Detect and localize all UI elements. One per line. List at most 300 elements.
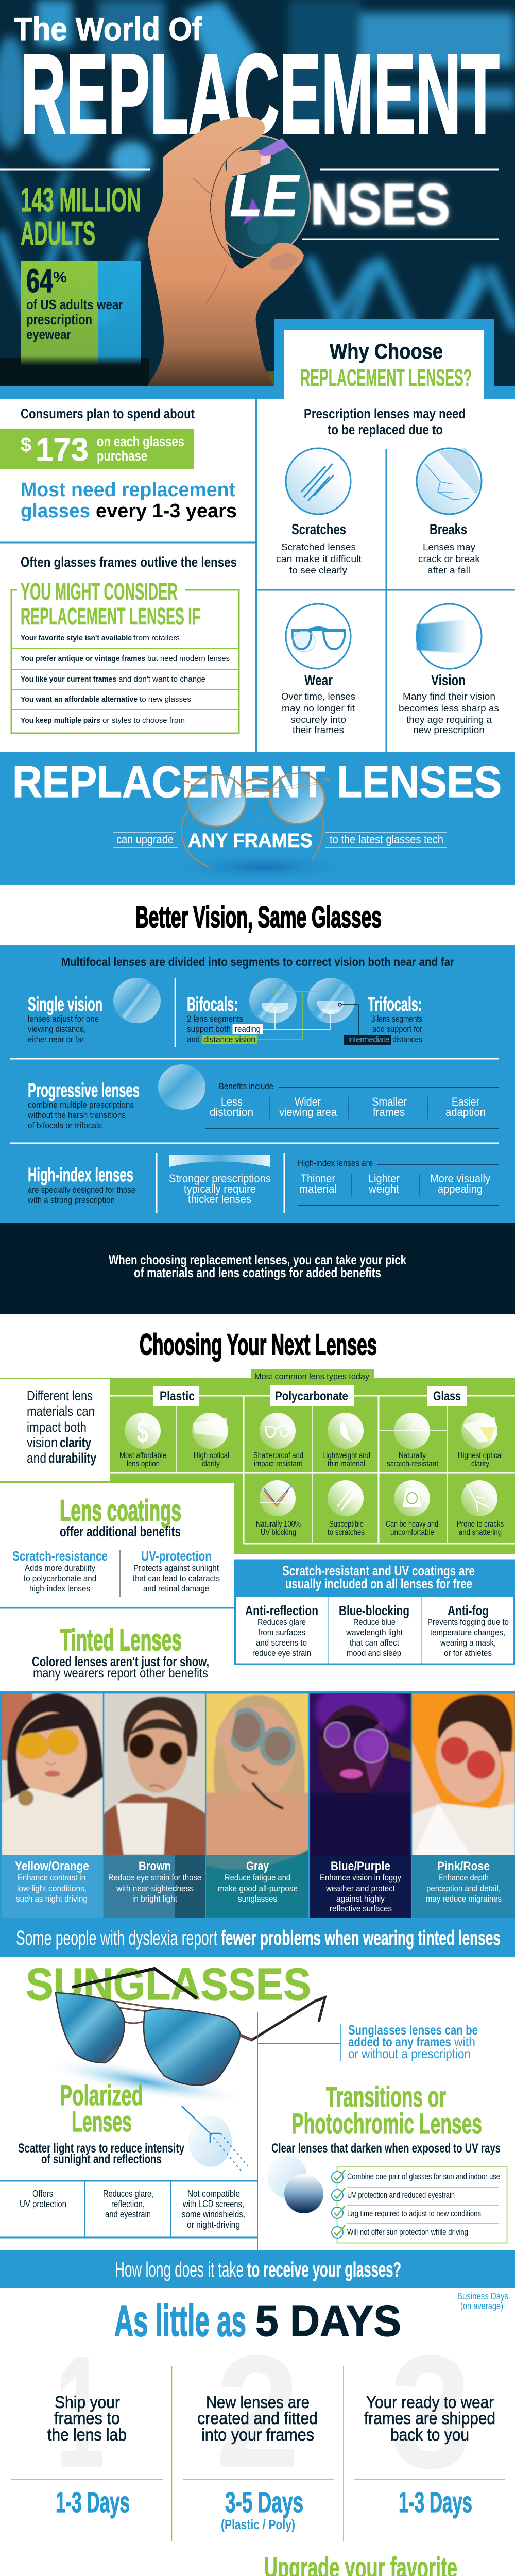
text: frames outlive lenses: Often glasses frames outlive the lenses — [21, 554, 237, 570]
text: most need replacement: glasses — [21, 500, 90, 522]
text: polarized description — [18, 2141, 184, 2166]
column: polycarbonate: Naturally 100% — [256, 1520, 301, 1529]
caption: yellow orange: Enhance contrast in — [18, 1873, 85, 1883]
text: different lens materials: impact both — [27, 1419, 87, 1435]
column: plastic: lens option — [127, 1460, 160, 1468]
stat box: 64%: prescription — [26, 312, 92, 327]
step 2: 3-5 Days — [225, 2486, 303, 2519]
table: polarized pros and cons: and eyestrain — [105, 2209, 151, 2219]
callout: materials and coatings: of materials and lens coatings for added benefits — [134, 1265, 381, 1280]
stat box: 64%: 64 — [26, 262, 53, 299]
column: glass: Naturally — [399, 1451, 426, 1460]
type: high-index — [27, 1164, 135, 1205]
big step numbers: 3 — [390, 2323, 472, 2502]
panel: tinted lens photos — [0, 1680, 515, 1957]
caption: pink rose: Enhance depth — [438, 1873, 489, 1883]
text: different lens materials: Different lens — [27, 1388, 93, 1403]
high-index lens profile: Stronger prescriptions — [169, 1172, 271, 1185]
column: polycarbonate: to scratches — [328, 1528, 365, 1537]
title: NSES blurred: NSES — [311, 172, 450, 236]
step 3 — [364, 2393, 495, 2519]
step 2: into your frames — [201, 2425, 314, 2444]
text: different lens materials: vision — [27, 1435, 58, 1450]
heading: polarized lenses: Lenses — [72, 2105, 132, 2138]
text: different lens materials: materials can — [27, 1403, 95, 1419]
panel: lens types — [0, 945, 515, 1223]
photo: yellow orange — [2, 1693, 103, 1918]
type: progressive: without the harsh transitions — [27, 1110, 126, 1120]
type: trifocals: 3 lens segments — [371, 1014, 422, 1024]
heading: tinted lenses: Tinted Lenses — [60, 1623, 182, 1657]
caption: yellow orange: low-light conditions, — [17, 1884, 87, 1893]
checklist: you might consider: from retailers — [133, 634, 180, 642]
progressive benefits — [205, 1081, 499, 1128]
heading: transitions: Transitions or — [326, 2080, 446, 2113]
title: The World Of: The World Of — [14, 11, 202, 47]
heading: lens coatings: Lens coatings — [60, 1494, 181, 1528]
reason: breaks: crack or break — [418, 554, 480, 564]
icon: worn glasses — [286, 604, 351, 669]
coating: scratch-resistance: Scratch-resistance — [12, 1548, 108, 1564]
stat banner: $173: purchase — [97, 448, 147, 464]
icon: polarized light rays — [182, 2106, 248, 2173]
stat: 143 million adults: ADULTS — [21, 214, 95, 252]
text: different lens materials — [27, 1388, 96, 1466]
stat banner: $173: on each glasses — [97, 434, 184, 449]
coating: uv-protection: UV-protection — [141, 1548, 212, 1564]
reason: wear — [281, 604, 355, 735]
illustration: sunglasses — [56, 1969, 325, 2086]
step 2: New lenses are — [206, 2393, 310, 2412]
progressive benefits: Smaller — [372, 1095, 407, 1108]
type: bifocals: reading — [235, 1024, 261, 1034]
type: single vision: either near or far — [28, 1035, 84, 1044]
type: single vision — [28, 978, 161, 1044]
caption: brown: Brown — [139, 1859, 171, 1873]
reason: vision: new prescription — [413, 725, 485, 735]
step 2 — [197, 2393, 318, 2532]
table: polarized pros and cons: Reduces glare, — [103, 2189, 153, 2199]
text: sunglasses lenses: or without a prescription — [348, 2046, 471, 2061]
step 2: created and fitted — [197, 2409, 318, 2428]
panel: replacement lenses any frames — [0, 752, 515, 885]
type: progressive: Progressive lenses — [28, 1080, 140, 1101]
subheading: additional benefits: offer additional benefits — [60, 1523, 181, 1539]
heading: as little as 5 days: As little as — [114, 2297, 246, 2346]
reason: vision: Many find their vision — [403, 691, 495, 702]
text: different lens materials: durability — [48, 1450, 96, 1466]
coating: anti-reflection: Reduces glare — [258, 1617, 306, 1627]
type: progressive: of bifocals or trifocals — [28, 1121, 102, 1130]
coating: anti-reflection: and screens to — [256, 1638, 307, 1648]
checklist: transitions: Will not offer sun protection while driving — [347, 2227, 468, 2237]
big step numbers: 1 — [55, 2323, 105, 2502]
coating: scratch-resistance: high-index lenses — [29, 1584, 90, 1594]
type: bifocals: and — [187, 1035, 200, 1044]
shadow under sunglasses — [40, 2049, 248, 2113]
banner: how long — [0, 2250, 515, 2288]
type: trifocals: add support for — [372, 1024, 422, 1034]
hero rule lines — [0, 170, 499, 239]
column: glass: scratch-resistant — [387, 1460, 439, 1468]
middle finger through lens — [227, 138, 289, 245]
checklist: you might consider: YOU MIGHT CONSIDER — [21, 578, 178, 605]
caption: gray: make good all-purpose — [218, 1884, 298, 1893]
caption: pink rose: Pink/Rose — [437, 1859, 490, 1873]
table lines — [110, 1396, 515, 1544]
heading: transitions — [291, 2080, 482, 2140]
coating: anti-fog — [427, 1603, 509, 1658]
caption: brown: in bright light — [132, 1894, 177, 1904]
step 2: (Plastic / Poly) — [221, 2517, 295, 2532]
reason: scratches — [276, 448, 362, 575]
table: polarized pros and cons: with LCD screens, — [182, 2199, 244, 2209]
type: high-index: High-index lenses — [28, 1164, 133, 1186]
coating: anti-fog: or for athletes — [444, 1648, 492, 1658]
text: sunglasses lenses: with — [454, 2034, 475, 2049]
text: colored lenses — [32, 1654, 209, 1681]
connector lines — [258, 990, 358, 1039]
text: sunglasses lenses: added to any frames — [348, 2034, 451, 2049]
dividers — [10, 978, 499, 1213]
step 3: back to you — [390, 2425, 469, 2444]
lens held in hand — [210, 136, 310, 258]
progressive benefits: viewing area — [279, 1106, 337, 1118]
caption: blue purple: Enhance vision in foggy — [320, 1873, 401, 1883]
high-index benefits: Thinner — [301, 1172, 335, 1185]
high-index lens profile: typically require — [184, 1182, 256, 1195]
type: trifocals: Trifocals: — [368, 994, 422, 1015]
hero panel — [0, 0, 515, 399]
text: colored lenses: many wearers report other benefits — [33, 1665, 208, 1681]
checklist: you might consider: You prefer antique or vintage frames — [21, 654, 145, 663]
coating: anti-reflection — [245, 1603, 318, 1658]
table: polarized pros and cons: UV protection — [20, 2199, 66, 2209]
title: REPLACEMENT: REPLACEMENT — [21, 30, 500, 157]
caption: blue purple — [320, 1859, 401, 1913]
caption: blue purple: weather and protect — [325, 1884, 395, 1893]
text: different lens materials: clarity — [60, 1435, 91, 1450]
coating: anti-fog: temperature changes, — [430, 1628, 505, 1637]
column: glass: Prone to cracks — [457, 1520, 504, 1529]
column: plastic: Plastic — [160, 1389, 195, 1403]
text: colored lenses: Colored lenses aren't just for show, — [32, 1654, 209, 1669]
reason: breaks: Lenses may — [423, 542, 475, 552]
caption: pink rose — [426, 1859, 502, 1904]
caption: yellow orange: Yellow/Orange — [15, 1859, 89, 1873]
text: different lens materials: and — [27, 1450, 46, 1466]
caption: gray: Reduce fatigue and — [225, 1873, 290, 1883]
white panel: why choose — [284, 330, 484, 399]
reason: wear: Wear — [304, 672, 333, 689]
caption: brown — [108, 1859, 201, 1904]
reason: breaks — [417, 448, 482, 575]
text: can upgrade any frames: ANY FRAMES — [188, 830, 313, 852]
column: plastic: $ — [137, 1415, 148, 1449]
caption: gray: sunglasses — [238, 1894, 277, 1904]
progressive benefits: Less — [221, 1095, 243, 1108]
type: high-index: with a strong prescription — [27, 1195, 115, 1205]
text: can upgrade any frames: can upgrade — [116, 833, 174, 846]
stat box: 64%: eyewear — [26, 327, 71, 342]
table: polarized pros and cons: reflection, — [111, 2199, 145, 2209]
note: business days: (on average) — [460, 2301, 503, 2311]
high-index benefits — [298, 1158, 499, 1205]
high-index benefits: material — [299, 1182, 337, 1195]
text: polarized description: of sunlight and reflections — [41, 2152, 162, 2166]
high-index lens profile: thicker lenses — [188, 1193, 251, 1206]
reason: wear: their frames — [293, 725, 344, 735]
caption: blue purple: against highly — [336, 1894, 385, 1904]
reason: vision — [399, 604, 499, 735]
panel: other coatings — [234, 1560, 515, 1664]
stat box: 64%: of US adults wear — [26, 297, 123, 312]
reason: wear: may no longer fit — [282, 703, 355, 714]
column: polycarbonate — [253, 1385, 370, 1537]
heading: why choose replacement lenses: Why Choose — [330, 339, 443, 363]
text: consumers plan to spend: Consumers plan to spend about — [21, 406, 195, 421]
icon: cracked lens — [417, 448, 482, 514]
high-index benefits: appealing — [438, 1182, 483, 1195]
type: single vision: Single vision — [28, 994, 102, 1015]
coating: uv-protection: that can lead to cataracts — [133, 1573, 220, 1583]
caption: gray — [218, 1859, 298, 1904]
type: single vision: viewing distance, — [28, 1024, 86, 1034]
blue frame around why choose — [0, 319, 515, 399]
column: glass — [380, 1386, 504, 1537]
reason: scratches: Scratches — [291, 521, 346, 538]
coating: blue-blocking: mood and sleep — [347, 1648, 401, 1658]
progressive benefits: distortion — [210, 1106, 253, 1118]
step 1: Ship your — [55, 2393, 120, 2412]
type: trifocals — [307, 978, 422, 1045]
text: prescription lenses may need replacing: Prescription lenses may need — [304, 406, 466, 421]
text: multifocal intro: Multifocal lenses are divided into segments to correct vision both near and far — [61, 955, 454, 969]
coating: anti-fog: wearing a mask, — [440, 1638, 496, 1648]
caption: blue purple: reflective surfaces — [330, 1904, 392, 1913]
type: progressive — [27, 1064, 205, 1130]
coating: blue-blocking — [339, 1603, 409, 1658]
reason: scratches: to see clearly — [289, 565, 347, 575]
callout: materials and coatings — [0, 1223, 515, 1314]
coating: blue-blocking: that can affect — [350, 1638, 399, 1648]
reason: wear: securely into — [290, 715, 346, 725]
step 3: frames are shipped — [364, 2409, 495, 2428]
heading: as little as 5 days: 5 DAYS — [255, 2297, 401, 2346]
title: NSES blurred: NSES — [311, 172, 450, 236]
callout: materials and coatings: When choosing replacement lenses, you can take your pick — [109, 1252, 406, 1267]
banner: how long: to receive your glasses? — [247, 2258, 401, 2281]
column: polycarbonate: UV blocking — [261, 1528, 296, 1537]
high-index benefits: More visually — [430, 1172, 490, 1185]
note: business days — [457, 2291, 508, 2311]
step 3: Your ready to wear — [366, 2393, 494, 2412]
text: can upgrade any frames: to the latest glasses tech — [330, 833, 443, 846]
column: plastic: clarity — [202, 1460, 220, 1468]
stat banner: $173: 173 — [36, 432, 89, 468]
text: prescription lenses may need replacing: to be replaced due to — [328, 422, 443, 437]
coating: scratch-resistance: to polycarbonate and — [24, 1573, 96, 1583]
shadow under glasses — [165, 853, 360, 882]
photo: pink rose — [412, 1693, 515, 1918]
hand — [147, 117, 304, 386]
coating: scratch-resistance — [12, 1548, 108, 1594]
checklist: you might consider: and don't want to change — [118, 675, 205, 684]
stat box: 64% — [21, 261, 141, 366]
caption: blue purple: Blue/Purple — [331, 1859, 390, 1873]
progressive benefits: adaption — [445, 1106, 486, 1118]
coating: blue-blocking: wavelength light — [346, 1628, 403, 1637]
type: high-index: are specially designed for those — [28, 1185, 135, 1195]
type: bifocals: distance vision — [203, 1035, 255, 1044]
photo: gray — [206, 1693, 308, 1918]
coating: anti-reflection: Anti-reflection — [245, 1603, 318, 1618]
banner: dyslexia: Some people with dyslexia report — [16, 1927, 217, 1950]
hero background — [0, 0, 515, 386]
column: glass: Glass — [433, 1389, 461, 1403]
column: glass: uncomfortable — [390, 1528, 434, 1537]
coating: uv-protection: and retinal damage — [143, 1584, 209, 1594]
checklist: you might consider: to new glasses — [140, 695, 191, 704]
reason: vision: Vision — [431, 672, 466, 689]
tab: most common: Most common lens types today — [254, 1371, 369, 1381]
icon: blurred vision — [417, 604, 482, 669]
step 1 — [47, 2393, 130, 2519]
coating: anti-reflection: from surfaces — [258, 1628, 305, 1637]
high-index benefits: Lighter — [368, 1172, 400, 1185]
panel: delivery timeline — [11, 2291, 508, 2541]
banner: how long: How long does it take — [115, 2258, 244, 2281]
column: plastic: High optical — [194, 1451, 229, 1460]
coating: blue-blocking: Blue-blocking — [339, 1603, 409, 1618]
checklist: you might consider — [11, 578, 239, 733]
text: polarized description: Scatter light rays to reduce intensity — [18, 2141, 184, 2156]
illustration: gold glasses — [181, 773, 330, 867]
caption: pink rose: perception and detail, — [426, 1884, 501, 1893]
checklist: you might consider: Your favorite style isn't available — [21, 634, 132, 642]
icon: scratched lens — [286, 448, 351, 514]
column: polycarbonate: Lightweight and — [322, 1451, 370, 1460]
high-index benefits: High-index lenses are — [298, 1158, 373, 1168]
big step numbers: 2 — [215, 2323, 300, 2502]
stat box: 64%: % — [53, 269, 67, 286]
checklist: you might consider: REPLACEMENT LENSES IF — [21, 603, 200, 630]
step 1: frames to — [54, 2409, 120, 2428]
column: glass: and shattering — [459, 1528, 502, 1537]
type: progressive: combine multiple prescriptions — [28, 1100, 134, 1110]
checklist: you might consider: You keep multiple pairs — [21, 716, 100, 725]
column: polycarbonate: Polycarbonate — [275, 1389, 348, 1403]
table: polarized pros and cons: some windshields, — [182, 2209, 245, 2219]
coating: scratch-resistance: Adds more durability — [25, 1563, 95, 1573]
stat: 143 million adults — [21, 181, 141, 252]
column: polycarbonate: Susceptible — [329, 1520, 364, 1529]
progressive benefits: frames — [373, 1106, 405, 1118]
text: most need replacement — [21, 479, 237, 522]
type: bifocals — [187, 978, 297, 1044]
step 1: 1-3 Days — [56, 2486, 130, 2519]
caption: brown: with near-sightedness — [116, 1884, 194, 1893]
text: prescription lenses may need replacing — [304, 406, 466, 437]
column: glass: clarity — [471, 1460, 489, 1468]
type: bifocals: Bifocals: — [187, 994, 238, 1015]
panel: why choose content — [0, 399, 515, 752]
text: sunglasses lenses: Sunglasses lenses can be — [348, 2022, 478, 2038]
checklist: transitions — [332, 2167, 507, 2243]
checklist: transitions: UV protection and reduced eyestrain — [347, 2190, 455, 2200]
photo: blue purple — [310, 1680, 411, 1918]
table: polarized pros and cons: Not compatible — [187, 2189, 240, 2199]
heading: polarized lenses — [60, 2079, 143, 2138]
stat: 143 million adults: 143 MILLION — [21, 181, 141, 218]
icon: photochromic lenses — [268, 2155, 323, 2213]
caption: brown: Reduce eye strain for those — [108, 1873, 201, 1883]
panel: lens coatings — [0, 1494, 234, 1681]
big step numbers — [55, 2323, 472, 2502]
type: bifocals: support both — [187, 1024, 231, 1034]
reason: wear: Over time, lenses — [281, 691, 355, 702]
reason: vision: they age requiring a — [406, 715, 492, 725]
reason: breaks: after a fall — [427, 565, 470, 575]
reason: scratches: Scratched lenses — [281, 542, 356, 552]
column: plastic: Most affordable — [119, 1451, 166, 1460]
column: polycarbonate: thin material — [328, 1460, 365, 1468]
panel: sunglasses — [0, 1959, 507, 2250]
table: polarized pros and cons — [0, 2181, 258, 2238]
progressive benefits: Wider — [295, 1095, 321, 1108]
text: can upgrade any frames — [113, 830, 447, 852]
type: trifocals: intermediate — [348, 1035, 389, 1044]
text: sunglasses lenses — [348, 2022, 478, 2061]
high-index lens profile — [169, 1155, 271, 1206]
reason: breaks: Breaks — [430, 521, 467, 538]
stat banner: $173: $ — [21, 434, 31, 456]
step 1: the lens lab — [47, 2425, 127, 2444]
stat banner: $173 — [0, 429, 194, 469]
progressive benefits: Easier — [452, 1095, 479, 1108]
coating: anti-reflection: reduce eye strain — [252, 1648, 311, 1658]
heading: polarized lenses: Polarized — [60, 2079, 143, 2111]
caption: yellow orange: such as night driving — [16, 1894, 88, 1904]
type: trifocals: distances — [392, 1035, 422, 1044]
column: plastic — [119, 1386, 229, 1468]
text: most need replacement: every 1-3 years — [96, 500, 237, 522]
checklist: you might consider: You like your current frames — [21, 675, 116, 684]
caption: pink rose: may reduce migraines — [426, 1894, 502, 1904]
coating: blue-blocking: Reduce blue — [353, 1617, 396, 1627]
column: polycarbonate: impact resistant — [254, 1460, 303, 1468]
column: glass: Highest optical — [458, 1451, 503, 1460]
high-index benefits: weight — [368, 1182, 399, 1195]
checklist: you might consider: or styles to choose from — [102, 716, 185, 725]
type: single vision: lenses adjust for one — [28, 1014, 99, 1024]
text: most need replacement: Most need replacement — [21, 479, 235, 501]
column: glass: Can be heavy and — [386, 1520, 438, 1529]
panel: lens materials table — [0, 1369, 515, 1554]
coating: uv-protection: Protects against sunlight — [133, 1563, 219, 1573]
checklist: you might consider: You want an affordable alternative — [21, 695, 138, 704]
coating: uv-protection — [133, 1548, 220, 1594]
divider lines — [258, 2012, 340, 2250]
title: LE through lens: LE — [230, 162, 300, 229]
heading: why choose replacement lenses — [300, 339, 472, 391]
type: bifocals: 2 lens segments — [187, 1014, 243, 1024]
column: polycarbonate: Shatterproof and — [253, 1451, 303, 1460]
photo: brown — [104, 1693, 205, 1918]
caption: gray: Gray — [246, 1859, 269, 1873]
reason: vision: becomes less sharp as — [399, 703, 499, 714]
banner: dyslexia — [16, 1927, 501, 1950]
